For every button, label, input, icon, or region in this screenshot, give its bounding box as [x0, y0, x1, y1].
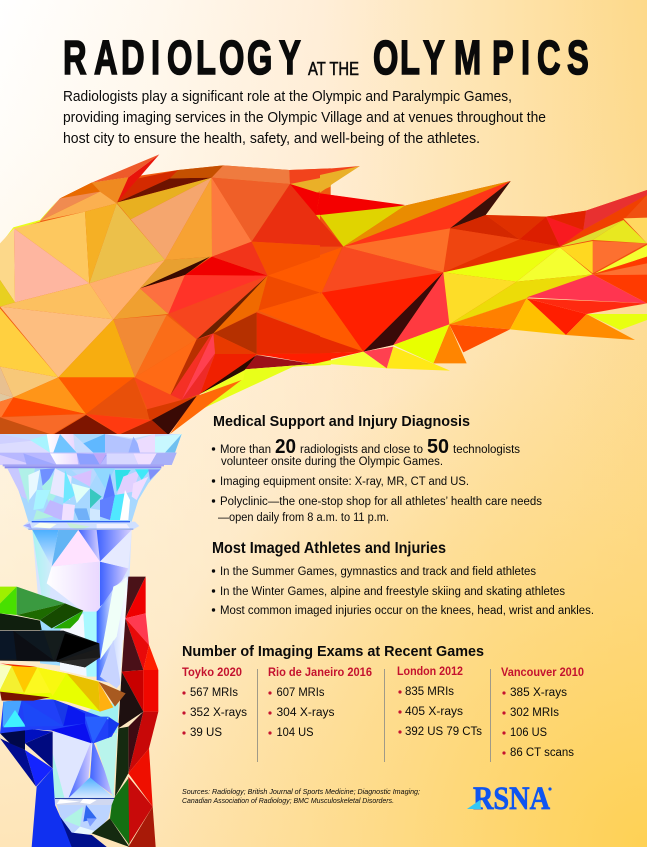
- title: AT THE: [308, 59, 359, 79]
- column: Rio de Janeiro 2016: 607 MRIs: [276, 687, 325, 699]
- section: most imaged athletes and injuries: [212, 540, 594, 617]
- column: London 2012: 405 X-rays: [405, 706, 463, 718]
- intro paragraph: host city to ensure the health, safety, and well-being of the athletes.: [63, 131, 480, 147]
- hand: green finger: [0, 587, 83, 630]
- heading: number of imaging exams: Number of Imaging Exams at Recent Games: [182, 644, 484, 660]
- column: London 2012: 392 US 79 CTs: [405, 726, 482, 738]
- column: Rio de Janeiro 2016: 304 X-rays: [276, 707, 335, 719]
- intro paragraph: providing imaging services in the Olympic Village and at venues throughout the: [63, 110, 546, 126]
- bullet list: athletes: In the Summer Games, gymnastics and track and field athletes: [220, 566, 536, 578]
- bullet list: medical support: radiologists and close to: [300, 444, 423, 456]
- icon: torch bottom bulb: [57, 805, 112, 836]
- bullet list: medical support: 20: [275, 436, 296, 458]
- bullet list: athletes: In the Winter Games, alpine and freestyle skiing and skating athletes: [220, 586, 565, 598]
- heading: most imaged athletes: Most Imaged Athletes and Injuries: [212, 540, 446, 557]
- illustration: flame of the torch: [0, 154, 647, 435]
- column: Toyko 2020: 39 US: [190, 727, 222, 739]
- bullet list: medical support: 50: [427, 436, 449, 458]
- column: Vancouver 2010: 86 CT scans: [510, 747, 574, 759]
- hand: black finger: [0, 631, 100, 667]
- bullet list: medical support: More than: [220, 444, 271, 456]
- torch sleeve: red arm: [92, 577, 158, 847]
- bullet list: medical support: Imaging equipment onsite: X-ray, MR, CT and US.: [220, 476, 469, 488]
- title: RADIOLOGY: [63, 31, 301, 85]
- intro paragraph: Radiologists play a significant role at the Olympic and Paralympic Games,: [63, 89, 512, 105]
- torch rim band: [0, 434, 182, 468]
- illustration: torch lower shaft and hand: [0, 577, 158, 847]
- intro paragraph: [63, 89, 546, 147]
- sources note: [182, 789, 420, 805]
- column: Rio de Janeiro 2016: [268, 667, 372, 739]
- torch lower stem: [51, 732, 122, 805]
- column: Rio de Janeiro 2016: Rio de Janeiro 2016: [268, 667, 372, 679]
- bullet list: athletes: Most common imaged injuries occur on the knees, head, wrist and ankles.: [220, 605, 594, 617]
- torch shaft upper: [32, 530, 132, 640]
- bullet list: medical support: Polyclinic—the one-stop shop for all athletes’ health care needs: [220, 496, 542, 508]
- bullet list: medical support: technologists: [453, 444, 520, 456]
- sources note: Canadian Association of Radiology; BMC Musculoskeletal Disorders.: [182, 798, 394, 805]
- bullet list: athletes: [212, 566, 594, 617]
- section: number of imaging exams: [182, 644, 584, 762]
- column: Rio de Janeiro 2016: 104 US: [276, 727, 314, 739]
- title: OLYMPICS: [373, 31, 589, 85]
- torch capital: [7, 468, 161, 522]
- hand: blue wrist and thumb: [0, 728, 107, 847]
- column: Vancouver 2010: 302 MRIs: [510, 707, 559, 719]
- column: Toyko 2020: Toyko 2020: [182, 667, 242, 679]
- bullet list: medical support: volunteer onsite during the Olympic Games.: [221, 456, 443, 468]
- column: London 2012: [397, 666, 482, 738]
- hand: blue finger: [0, 699, 119, 743]
- column: Toyko 2020: [182, 667, 247, 739]
- column: Vancouver 2010: Vancouver 2010: [501, 667, 584, 679]
- column: Vancouver 2010: 106 US: [510, 727, 547, 739]
- torch collar ring: [23, 521, 139, 530]
- hand: yellow finger: [0, 663, 126, 712]
- heading: medical support: Medical Support and Injury Diagnosis: [213, 413, 470, 430]
- bullet list: medical support: —open daily from 8 a.m. to 11 p.m.: [218, 512, 389, 524]
- column: London 2012: 835 MRIs: [405, 686, 454, 698]
- bullet list: medical support: [212, 436, 542, 524]
- column: London 2012: London 2012: [397, 666, 463, 678]
- torch shaft mid section: [40, 580, 127, 733]
- column: Vancouver 2010: 385 X-rays: [510, 687, 567, 699]
- logo: RSNA: RSNA: [473, 781, 550, 817]
- illustration: torch cup and shaft: [0, 434, 182, 640]
- column: Toyko 2020: 567 MRIs: [190, 687, 238, 699]
- flame left half: [0, 154, 331, 435]
- column: Vancouver 2010: [501, 667, 584, 759]
- title: [63, 31, 589, 85]
- flame right half: [320, 166, 647, 371]
- column: Toyko 2020: 352 X-rays: [190, 707, 247, 719]
- section: medical support and injury diagnosis: [212, 413, 542, 524]
- sources note: Sources: Radiology; British Journal of Sports Medicine; Diagnostic Imaging;: [182, 789, 420, 796]
